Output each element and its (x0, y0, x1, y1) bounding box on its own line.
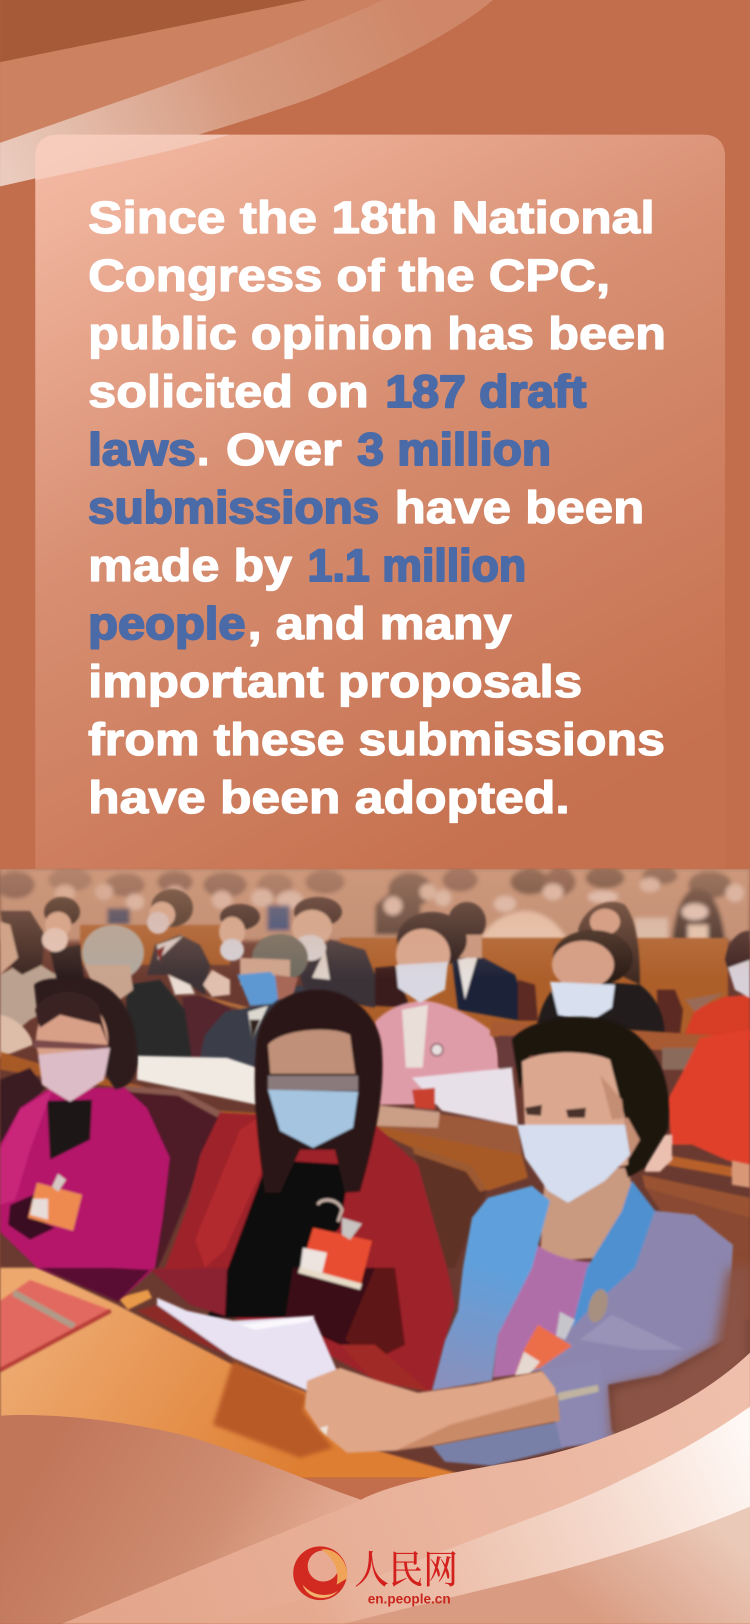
dark man with mask (50, 944, 85, 980)
brooch (586, 1288, 608, 1323)
body text: have been (395, 482, 644, 533)
mid chair (416, 1156, 486, 1267)
badge (515, 1312, 575, 1376)
body text: people (88, 598, 246, 649)
body text: 187 draft (385, 366, 586, 417)
document and hand (137, 1298, 599, 1453)
delegate: dark red jacket (150, 990, 455, 1392)
body text: public opinion has been (88, 308, 666, 359)
sleeve cuff (558, 1385, 599, 1401)
chair (182, 996, 233, 1058)
body text: 1.1 million (308, 540, 526, 591)
bright red sleeve (667, 1030, 750, 1165)
jacket (432, 1186, 550, 1391)
person behind masked woman (578, 902, 640, 985)
front desk (0, 1268, 480, 1480)
logo emblem (293, 1546, 347, 1600)
body text (88, 192, 666, 823)
body text: made by (88, 540, 293, 591)
photo: delegates in the Great Hall (0, 867, 750, 1480)
crowd in the background (0, 867, 750, 945)
logo url: en.people.cn (368, 1591, 451, 1606)
man with blue mask (200, 984, 305, 1068)
left chair (130, 1092, 218, 1268)
masked woman, right (535, 980, 665, 1036)
second row delegates (0, 888, 750, 1072)
chairs (375, 966, 410, 1008)
body text: , and many (248, 598, 512, 649)
chair and desk at right (665, 1155, 737, 1178)
papers on desk (137, 1056, 257, 1105)
delegate: blue jacket (432, 1017, 733, 1466)
logo: People's Daily Online (293, 1546, 458, 1606)
hand with paper (168, 975, 195, 995)
body text: have been adopted. (88, 772, 570, 823)
back row desk (80, 925, 728, 1036)
middle desk rows (0, 1021, 750, 1320)
far left delegate (0, 964, 58, 1027)
delegate badge (28, 1174, 82, 1231)
man with glasses (220, 904, 260, 930)
top decorative swooshes (0, 0, 493, 186)
panel: text card (35, 135, 725, 869)
right forearm and hand (305, 1368, 560, 1453)
suit behind pink woman (451, 956, 520, 1022)
neck and shirt (540, 1168, 640, 1262)
body text: solicited on (88, 366, 369, 417)
body text: Since the 18th National (88, 192, 655, 243)
red folder and pen (0, 1280, 112, 1373)
body text: important proposals (88, 656, 582, 707)
bottom waves (0, 1353, 750, 1624)
body text: Over (226, 424, 342, 475)
body text: laws (88, 424, 196, 475)
delegate: magenta jacket (0, 978, 170, 1302)
photo shadow along curve (610, 1265, 750, 1445)
body text: submissions (88, 482, 379, 533)
delegate badge (298, 1228, 372, 1290)
logo wordmark: 人民网 (354, 1549, 458, 1593)
head (512, 1017, 669, 1178)
man with red tie (147, 935, 210, 995)
man with grey suit, right (300, 940, 375, 1008)
body text: 3 million (357, 424, 551, 475)
body text: Congress of the CPC, (88, 250, 610, 301)
body text: from these submissions (88, 714, 665, 765)
grey-haired man (125, 980, 192, 1066)
body text: . (197, 424, 210, 475)
far right delegate (682, 995, 750, 1041)
pink-jacket woman (374, 1000, 500, 1072)
